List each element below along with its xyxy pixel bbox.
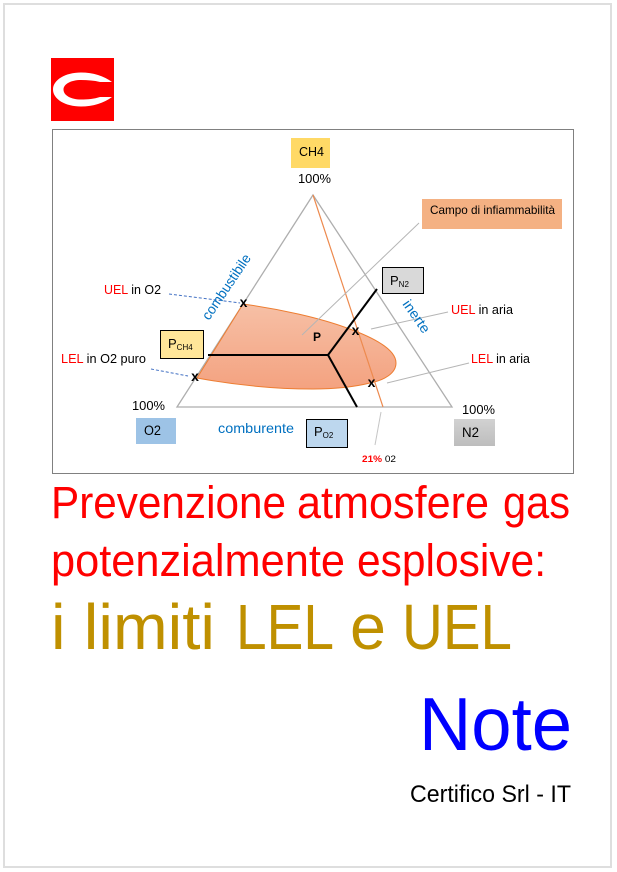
subtitle: i limiti xyxy=(51,591,215,663)
box PO2: P xyxy=(314,424,323,439)
subtitle: UEL xyxy=(402,591,512,663)
publisher: Certifico Srl - IT xyxy=(410,781,571,808)
label UEL in O2: UEL in O2 xyxy=(104,282,161,297)
box campo di infiammabilita: Campo di infiammabilità xyxy=(430,203,555,217)
partial pressure lines xyxy=(208,289,377,407)
subtitle: LEL xyxy=(236,591,334,663)
box campo di infiammabilita xyxy=(422,199,562,229)
flammability region xyxy=(197,304,396,389)
label 100% right: 100% xyxy=(462,402,495,417)
title line 2: esplosive: xyxy=(357,535,546,586)
box N2: N2 xyxy=(462,425,479,440)
label 100% left: 100% xyxy=(132,398,165,413)
X markers and P: x xyxy=(191,368,199,384)
box CH4: CH4 xyxy=(299,144,324,159)
label comburente: comburente xyxy=(218,420,294,436)
label LEL in aria: LEL in aria xyxy=(471,351,531,366)
Note: Note xyxy=(419,682,572,766)
title line 2 xyxy=(51,535,546,586)
label combustibile: combustibile xyxy=(198,251,254,323)
box CH4 xyxy=(291,138,330,168)
title line 2: potenzialmente xyxy=(51,535,345,586)
subtitle: e xyxy=(350,591,386,663)
label 100% top: 100% xyxy=(298,171,331,186)
X markers and P xyxy=(191,294,376,390)
X markers and P: x xyxy=(368,374,376,390)
label inerte: inerte xyxy=(400,297,434,336)
leader lines xyxy=(151,223,469,445)
box PCH4: CH4 xyxy=(177,343,193,352)
box PO2 xyxy=(306,420,348,448)
box PO2: O2 xyxy=(323,431,334,440)
logo xyxy=(51,58,114,121)
box O2: O2 xyxy=(144,423,161,438)
title line 1: atmosfere xyxy=(297,477,489,528)
title line 1 xyxy=(51,477,570,528)
box PN2: P xyxy=(390,273,399,288)
label LEL in O2 puro: LEL in O2 puro xyxy=(61,351,146,366)
title line 1: Prevenzione xyxy=(51,477,286,528)
label UEL in aria: UEL in aria xyxy=(451,302,514,317)
box PCH4: P xyxy=(168,336,177,351)
box O2 xyxy=(136,418,176,444)
X markers and P: x xyxy=(240,294,248,310)
box N2 xyxy=(454,419,495,446)
X markers and P: x xyxy=(352,322,360,338)
triangle xyxy=(177,195,452,407)
subtitle xyxy=(51,591,512,663)
ternary diagram panel xyxy=(52,130,574,474)
box PN2 xyxy=(382,268,424,294)
box PCH4 xyxy=(160,330,204,358)
box PN2: N2 xyxy=(399,280,409,289)
label 21% O2: 21% 02 xyxy=(362,454,396,465)
X markers and P: P xyxy=(313,330,321,344)
title line 1: gas xyxy=(503,477,570,528)
21% O2 line xyxy=(313,195,383,407)
